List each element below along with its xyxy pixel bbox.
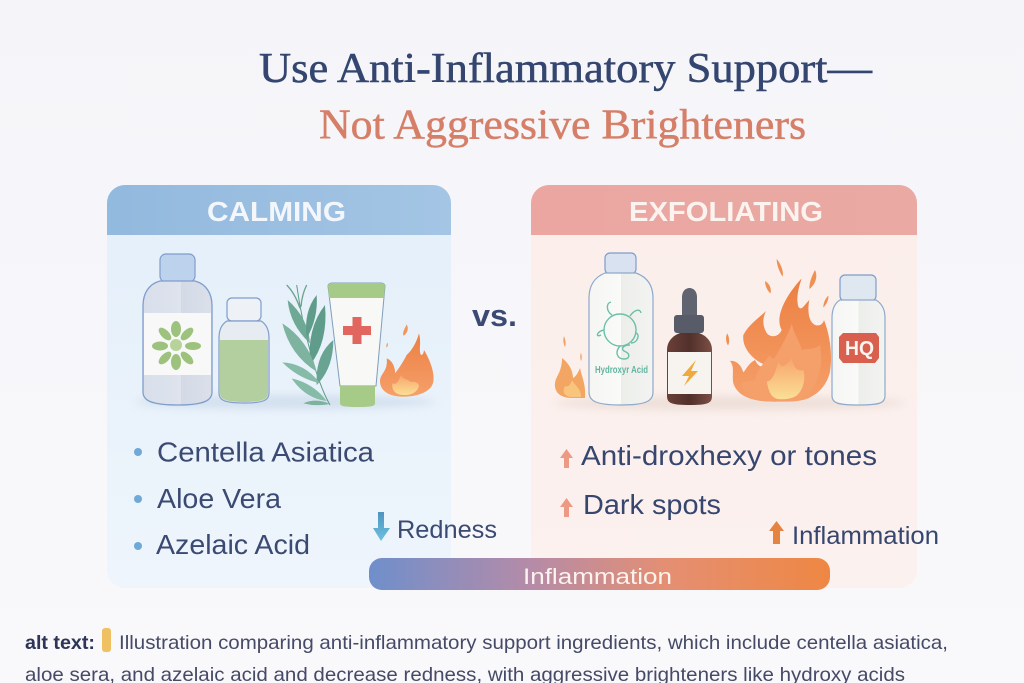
heading: exfoliating: EXFOLIATING (629, 196, 823, 227)
icon: large flame (726, 259, 831, 402)
panel: calming (107, 185, 451, 588)
title (259, 46, 873, 148)
arrow: inflammation up (769, 521, 784, 544)
list: exfoliating effects: Anti-droxhexy or tones (581, 440, 877, 471)
list: calming ingredients: Aloe Vera (157, 483, 282, 514)
arrow: redness down (373, 512, 390, 541)
label: redness: Redness (397, 516, 497, 544)
list: calming ingredients: Centella Asiatica (157, 436, 375, 468)
alt text (25, 628, 948, 683)
icon: HQ bottle (832, 275, 885, 405)
text: vs.: vs. (472, 298, 517, 333)
alt text: Illustration comparing anti-inflammatory support ingredients, which include centella asiatica, (119, 632, 948, 654)
icon: cream tube with red cross (328, 283, 385, 407)
inflammation gradient bar: Inflammation (523, 564, 672, 589)
icon: green leaves (282, 285, 333, 405)
heading: calming: CALMING (207, 196, 346, 227)
icon: dropper bottle (667, 288, 712, 405)
label: inflammation: Inflammation (792, 522, 939, 550)
title: Use Anti-Inflammatory Support— (259, 46, 873, 92)
panel: exfoliating (531, 185, 917, 588)
inflammation gradient bar (369, 558, 830, 590)
title: Not Aggressive Brighteners (319, 102, 806, 148)
list: calming ingredients: Azelaic Acid (156, 529, 310, 560)
arrow: up (560, 449, 573, 468)
icon: hydroxy acid bottle (589, 253, 653, 405)
icon: small flame (380, 324, 434, 397)
alt text: alt text: (25, 632, 95, 654)
text: bottle label: Hydroxyr Acid (595, 365, 648, 376)
icon: large bottle with centella label (143, 254, 212, 405)
icon: small bottle with green liquid (219, 298, 269, 403)
icon: small flame left (555, 336, 585, 398)
list: exfoliating effects (560, 440, 877, 520)
arrow: up (560, 498, 573, 517)
list: calming ingredients (134, 436, 375, 560)
text: HQ: HQ (845, 338, 874, 360)
list: exfoliating effects: Dark spots (583, 489, 721, 520)
